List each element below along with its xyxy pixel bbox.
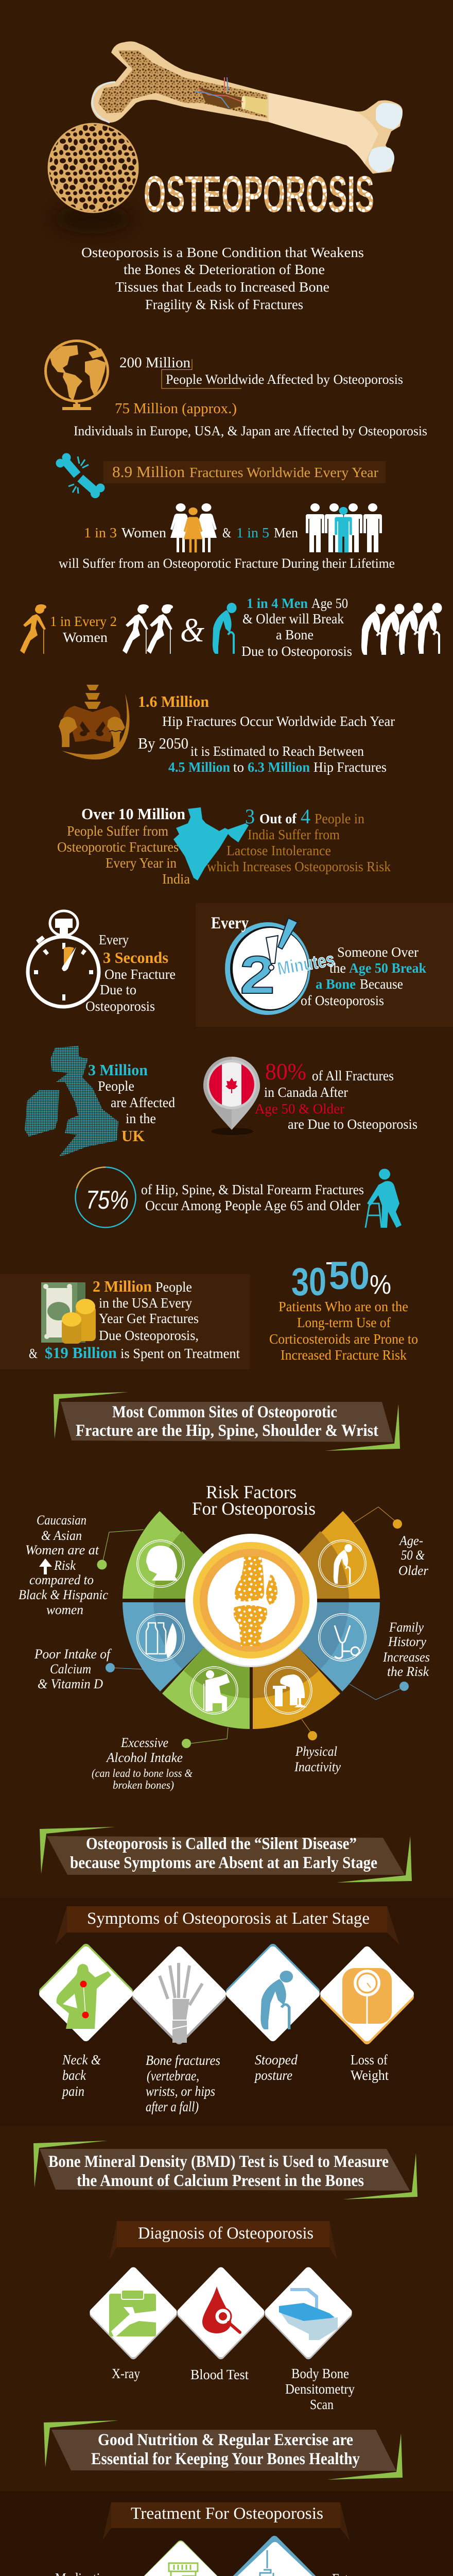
text: every 2 minutes: [211, 914, 426, 1008]
icon: elderly man: [213, 603, 237, 654]
text: diagnosis labels: Scan: [310, 2397, 334, 2412]
text: 3 out of 4: Out of: [259, 811, 297, 826]
text: every 3 seconds: One Fracture: [104, 967, 176, 982]
text: every 2 minutes: Someone Over: [337, 944, 419, 960]
icon: elderly person: [319, 1540, 366, 1587]
text: 1 in 3 women and 1 in 5 men: Men: [274, 525, 298, 540]
text: usa costs: in the USA Every: [99, 1295, 192, 1311]
text: usa costs: People: [155, 1279, 192, 1295]
callout: alcohol: broken bones): [113, 1778, 174, 1791]
callout: caucasian and asian women: Caucasian: [37, 1513, 86, 1528]
text: 3 million uk: People: [98, 1078, 134, 1094]
text: 3 out of 4: India Suffer from: [248, 827, 340, 842]
panel: every 2 minutes: [196, 903, 453, 1027]
text: symptom labels: back: [62, 2067, 86, 2083]
icon: india map: [173, 807, 249, 880]
text: symptom labels: wrists, or hips: [146, 2083, 215, 2099]
text: 30-50 percent: 30: [291, 1260, 326, 1304]
callout: alcohol: Excessive: [120, 1735, 168, 1750]
panel: symptoms: [43, 1906, 410, 2114]
callout: family history: [350, 1620, 430, 1700]
text: 3 million uk: in the: [126, 1111, 156, 1126]
text: diagnosis labels: Densitometry: [285, 2381, 355, 2397]
icon: globe: [45, 341, 108, 410]
panel: hip fractures: [59, 685, 395, 775]
text: symptom labels: Weight: [351, 2067, 389, 2083]
text: 80 percent canada: 80%: [265, 1058, 306, 1084]
text: hip fracture stats: By 2050: [138, 734, 188, 752]
banner: common sites: [54, 1392, 400, 1451]
callout: alcohol: [92, 1727, 228, 1791]
text: corticosteroids risk: Corticosteroids are Prone to: [269, 1331, 418, 1347]
intro text: Osteoporosis is a Bone Condition that Weakens: [81, 245, 364, 260]
text: every 2 minutes: the: [329, 960, 346, 976]
text: every 2 minutes: of Osteoporosis: [301, 993, 384, 1008]
text: 1 in 3 women and 1 in 5 men: &: [222, 525, 231, 540]
icon: blood test: [181, 2271, 260, 2355]
icon: 75 percent ring: 75%: [86, 1185, 129, 1214]
text: 30-50 percent: 50: [329, 1254, 370, 1298]
text: 3 out of 4: [207, 805, 391, 874]
text: 30-50 percent: [291, 1254, 391, 1304]
icon: women group: [170, 503, 217, 552]
panel: diagnosis: [94, 2221, 355, 2412]
text: symptom labels: Bone fractures: [146, 2053, 220, 2068]
text: treatment labels: [55, 2570, 398, 2576]
chart: risk wheel: [123, 1511, 380, 1729]
panel: treatment: [55, 2502, 398, 2576]
text: symptom labels: pain: [61, 2083, 84, 2099]
icon: 2 minutes clock: [225, 918, 336, 1015]
text: symptom labels: posture: [254, 2067, 292, 2083]
panel: worldwide stats: [20, 341, 442, 659]
text: 1 in every 2 women: 1 in Every 2: [50, 614, 117, 629]
callout: inactivity: [294, 1719, 341, 1774]
panel: usa costs: [0, 1274, 250, 1369]
text: symptom labels: Loss of: [351, 2052, 388, 2067]
text: ampersand: &: [180, 612, 205, 649]
text: over 10 million: Osteoporotic Fractures: [57, 839, 179, 855]
heading: risk factors: For Osteoporosis: [192, 1498, 316, 1519]
text: usa costs: is Spent on Treatment: [120, 1346, 240, 1361]
text: 3 million uk: [88, 1061, 175, 1145]
text: 80 percent canada: Age 50 & Older: [255, 1101, 344, 1116]
heading: risk factors: [192, 1482, 316, 1519]
icon: elderly women: [20, 604, 173, 654]
text: every 3 seconds: [85, 932, 176, 1014]
text: over 10 million: People Suffer from: [67, 823, 168, 839]
panel: risk factors: [19, 1482, 430, 1791]
text: 30-50 percent: %: [370, 1270, 391, 1300]
text: symptom labels: (vertebrae,: [147, 2068, 199, 2083]
banner: bmd test: [33, 2141, 417, 2199]
callout: poor intake: & Vitamin D: [38, 1676, 103, 1691]
text: corticosteroids risk: [269, 1299, 418, 1363]
text: 1 in 3 women and 1 in 5 men: 1 in 5: [236, 525, 269, 540]
icon: canada map pin: [203, 1057, 260, 1135]
callout: family history: the Risk: [387, 1664, 429, 1679]
callout: poor intake: Calcium: [50, 1662, 91, 1676]
callout: alcohol: (can lead to bone loss &: [92, 1767, 193, 1780]
text: corticosteroids risk: Long-term Use of: [297, 1315, 391, 1330]
text: 3 out of 4: Lactose Intolerance: [226, 843, 331, 858]
callout: caucasian and asian women: compared to: [29, 1572, 94, 1587]
text: every 3 seconds: Due to: [100, 982, 136, 997]
icon: broken bone: [56, 453, 105, 498]
text: corticosteroids risk: Patients Who are on the: [278, 1299, 408, 1314]
text: symptom labels: Neck &: [62, 2052, 101, 2067]
callout: family history: Family: [389, 1620, 424, 1635]
text: 200 million: [119, 354, 403, 388]
text: 3 million uk: 3 Million: [88, 1061, 148, 1079]
text: lifetime fracture: will Suffer from an Osteoporotic Fracture During their Lifetime: [59, 556, 395, 571]
text: 200 million: 200 Million: [119, 354, 190, 371]
text: symptom labels: [61, 2052, 389, 2114]
text: hip fracture stats: Hip Fractures Occur Worldwide Each Year: [162, 714, 395, 729]
callout: family history: History: [388, 1634, 426, 1649]
text: symptom labels: Stooped: [255, 2052, 298, 2067]
ribbon: symptoms heading: Symptoms of Osteoporosis at Later Stage: [87, 1909, 370, 1928]
icon: neck and back pain: [43, 1948, 129, 2037]
callout: poor intake: Poor Intake of: [34, 1647, 112, 1662]
text: symptom labels: after a fall): [146, 2099, 199, 2114]
callout: poor intake: [34, 1647, 143, 1691]
icon: stethoscope: [319, 1614, 366, 1661]
text: 75 million: 75 Million (approx.): [115, 400, 237, 417]
text: usa costs: Due Osteoporosis,: [99, 1328, 199, 1343]
intro text: the Bones & Deterioration of Bone: [124, 262, 325, 277]
text: 1 in 3 women and 1 in 5 men: Women: [121, 525, 167, 540]
text: 1 in 4 men: & Older will Break: [242, 611, 344, 626]
callout: alcohol: Alcohol Intake: [106, 1750, 183, 1765]
heading: risk factors: Risk Factors: [206, 1482, 297, 1502]
text: 80 percent canada: are Due to Osteoporosis: [288, 1116, 417, 1132]
text: usa costs: 2 Million: [93, 1277, 152, 1295]
text: 1 in 4 men: Age 50: [311, 596, 348, 611]
text: corticosteroids risk: Increased Fracture Risk: [281, 1347, 407, 1363]
text: 200 million: People Worldwide Affected by Osteoporosis: [166, 372, 403, 387]
text: hip fracture stats: [138, 692, 395, 775]
callout: 8.9 million fractures: 8.9 Million: [112, 463, 185, 481]
text: 3 out of 4: 3: [245, 805, 255, 828]
text: diagnosis labels: [112, 2366, 355, 2412]
panel: 75 percent: [75, 1167, 402, 1228]
text: usa costs: $19 Billion: [45, 1344, 117, 1362]
icon: person with walker: [365, 1168, 402, 1228]
callout: 8.9 million fractures: Fractures Worldwide Every Year: [189, 465, 378, 480]
icon: person at desk: [265, 1667, 312, 1714]
text: every 3 seconds: 3 Seconds: [103, 948, 168, 967]
callout: age: Age-: [398, 1533, 423, 1548]
callout: caucasian and asian women: Women are at: [25, 1543, 99, 1557]
callout: caucasian and asian women: Black & Hispanic: [19, 1587, 108, 1602]
text: diagnosis labels: Body Bone: [291, 2366, 349, 2381]
callout: inactivity: Inactivity: [294, 1759, 341, 1774]
icon: 2 minutes clock: Minutes: [275, 948, 336, 979]
ribbon: treatment heading: [102, 2502, 350, 2540]
callout: 8.9 million fractures: [103, 461, 386, 483]
text: 80 percent canada: of All Fractures: [312, 1068, 394, 1083]
text: over 10 million: [57, 805, 190, 887]
panel: canada: [203, 1057, 417, 1135]
text: diagnosis labels: Blood Test: [190, 2367, 249, 2382]
icon: hand x-ray: [136, 1951, 222, 2043]
icon: 75 percent ring: [75, 1167, 136, 1227]
text: hip fracture stats: 4.5 Million: [168, 759, 230, 775]
icon: stopwatch: [28, 911, 99, 1007]
text: usa costs: Year Get Fractures: [99, 1311, 199, 1326]
text: usa costs: [29, 1277, 240, 1362]
text: every 3 seconds: Osteoporosis: [85, 998, 155, 1014]
text: every 2 minutes: Every: [211, 914, 249, 933]
text: 80 percent canada: [255, 1058, 417, 1132]
icon: femur bone: [91, 41, 403, 174]
callout: family history: Increases: [382, 1650, 430, 1665]
icon: x-ray: [94, 2271, 173, 2355]
banner: silent disease: because Symptoms are Absent at an Early Stage: [70, 1854, 377, 1872]
icon: money and coins: [41, 1282, 96, 1344]
icon: knee bones: [234, 1556, 277, 1646]
text: 1 in 4 men: Due to Osteoporosis: [241, 643, 352, 659]
icon: person drinking: [190, 1667, 238, 1714]
text: 3 million uk: UK: [121, 1127, 145, 1145]
icon: uk dot map: [25, 1046, 118, 1156]
text: 75 million: Individuals in Europe, USA, & Japan are Affected by Osteoporosis: [74, 423, 427, 438]
icon: pelvis: [59, 685, 129, 759]
icon: medication bottle: [138, 2545, 223, 2576]
text: 1 in every 2 women: [50, 614, 117, 645]
callout: caucasian and asian women: women: [46, 1602, 83, 1617]
callout: caucasian and asian women: [19, 1513, 144, 1617]
icon: dairy and fish: [137, 1614, 184, 1661]
callout: caucasian and asian women: Risk: [54, 1558, 76, 1573]
icon: woman profile: [137, 1540, 184, 1587]
text: over 10 million: Over 10 Million: [81, 805, 185, 823]
text: hip fracture stats: 6.3 Million: [248, 759, 310, 775]
text: every 2 minutes: Age 50 Break: [349, 960, 426, 976]
text: over 10 million: Every Year in: [106, 855, 177, 871]
text: every 2 minutes: a Bone: [316, 976, 356, 992]
text: 75 percent fractures: of Hip, Spine, & Distal Forearm Fractures: [141, 1182, 364, 1197]
panel: uk: [25, 1046, 175, 1156]
callout: inactivity: Physical: [295, 1744, 337, 1759]
banner: common sites: Most Common Sites of Osteoporotic: [112, 1403, 337, 1421]
icon: men group: [306, 503, 382, 552]
text: over 10 million: India: [162, 871, 190, 887]
text: every 3 seconds: Every: [99, 932, 129, 947]
text: 3 out of 4: which Increases Osteoporosis Risk: [207, 859, 391, 874]
intro text: [81, 245, 364, 312]
text: hip fracture stats: it is Estimated to Reach Between: [190, 743, 364, 759]
banner: silent disease: Osteoporosis is Called the “Silent Disease”: [86, 1835, 357, 1853]
icon: weighing scale: [324, 1951, 410, 2040]
icon: elderly men group: [361, 603, 442, 655]
panel: corticosteroids: [269, 1254, 418, 1363]
panel: india: [57, 805, 391, 887]
ribbon: symptoms heading: [55, 1906, 399, 1945]
ribbon: treatment heading: Treatment For Osteoporosis: [131, 2504, 323, 2523]
icon: spongy bone cross-section: [48, 124, 138, 233]
callout: age: 50 &: [401, 1548, 425, 1563]
text: 75 percent fractures: [141, 1182, 364, 1213]
text: 1 in 4 men: a Bone: [276, 627, 313, 642]
banner: silent disease: [40, 1827, 412, 1883]
panel: hero: [48, 41, 403, 312]
text: 3 out of 4: People in: [315, 811, 364, 826]
intro text: Tissues that Leads to Increased Bone: [115, 279, 329, 295]
text: hip fracture stats: 1.6 Million: [138, 692, 209, 710]
banner: nutrition and exercise: Good Nutrition & Regular Exercise are: [98, 2431, 353, 2449]
banner: nutrition and exercise: [44, 2420, 403, 2480]
ribbon: diagnosis heading: Diagnosis of Osteoporosis: [138, 2224, 313, 2243]
text: hip fracture stats: Hip Fractures: [313, 759, 387, 775]
panel: every 3 seconds: [28, 911, 176, 1014]
text: hip fracture stats: to: [233, 759, 244, 775]
ribbon: diagnosis heading: [109, 2221, 337, 2260]
text: 1 in every 2 women: Women: [63, 630, 108, 645]
text: 1 in 4 men: 1 in 4 Men: [247, 596, 308, 611]
banner: common sites: Fracture are the Hip, Spine, Shoulder & Wrist: [76, 1421, 378, 1440]
callout: age: [354, 1507, 429, 1578]
icon: 2 minutes clock: 2: [240, 945, 275, 1005]
text: diagnosis labels: X-ray: [112, 2366, 140, 2381]
icon: stooped posture: [230, 1948, 316, 2037]
text: 75 percent fractures: Occur Among People Age 65 and Older: [145, 1198, 360, 1213]
text: every 2 minutes: Because: [360, 976, 403, 992]
text: 80 percent canada: in Canada After: [264, 1084, 348, 1100]
banner: nutrition and exercise: Essential for Keeping Your Bones Healthy: [91, 2450, 360, 2468]
banner: bmd test: Bone Mineral Density (BMD) Test is Used to Measure: [48, 2153, 389, 2171]
text: 3 out of 4: 4: [301, 805, 310, 828]
callout: age: Older: [398, 1563, 429, 1578]
text: usa costs: &: [29, 1346, 38, 1361]
text: 3 million uk: are Affected: [111, 1095, 175, 1110]
text: 75 million: [74, 400, 427, 438]
text: 1 in 4 men: [241, 596, 352, 659]
intro text: Fragility & Risk of Fractures: [145, 297, 303, 312]
banner: bmd test: the Amount of Calcium Present in the Bones: [77, 2172, 364, 2190]
icon: bone density scanner: [269, 2271, 348, 2355]
text: 1 in 3 women and 1 in 5 men: [84, 525, 298, 540]
callout: caucasian and asian women: & Asian: [41, 1528, 82, 1543]
text: 1 in 3 women and 1 in 5 men: 1 in 3: [84, 525, 117, 540]
icon: syringe and pills: [232, 2540, 317, 2576]
